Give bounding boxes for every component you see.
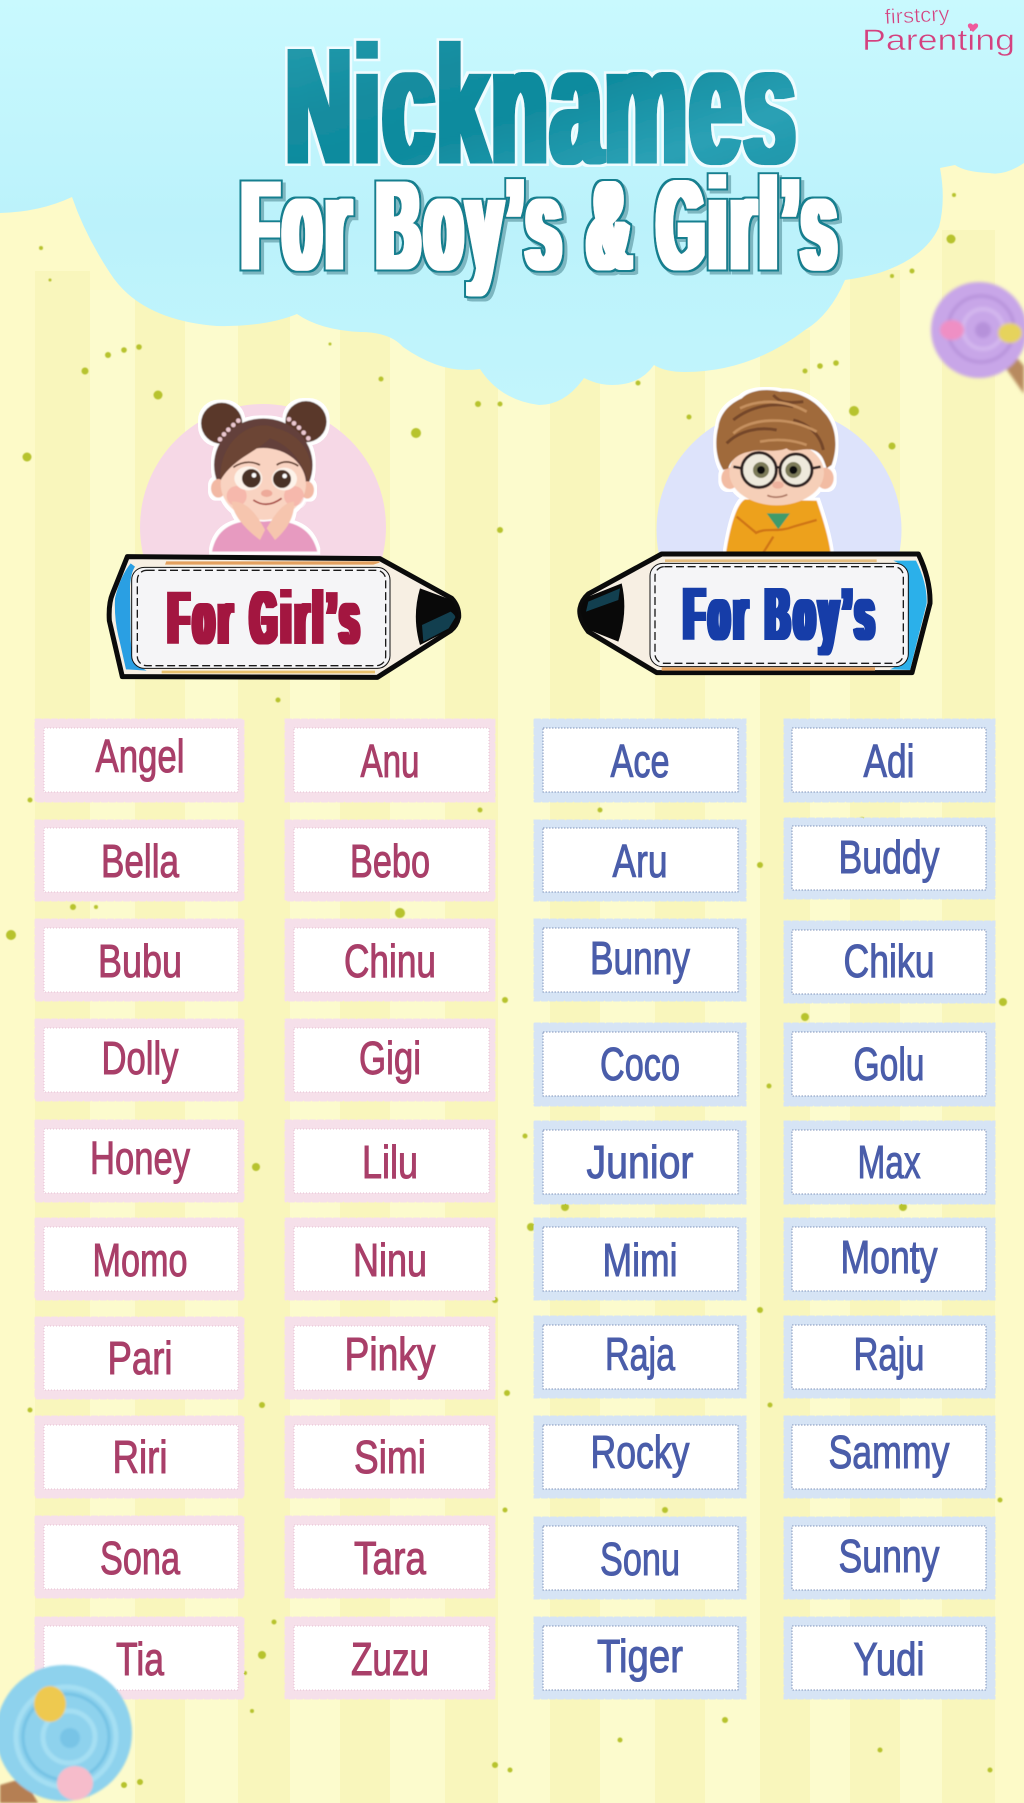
card: Coco: Coco — [600, 1038, 680, 1090]
card: Chinu: Chinu — [344, 935, 436, 987]
card: Momo — [36, 1219, 243, 1299]
card: Adi — [785, 720, 994, 801]
card: Mimi — [535, 1219, 745, 1299]
card: Chiku — [785, 922, 994, 1002]
card: Aru — [535, 821, 745, 900]
heading: For Girl's: For Girl’s — [168, 578, 363, 660]
logo: FirstCry Parenting: firstcry — [884, 3, 951, 29]
card: Simi: Simi — [354, 1431, 426, 1483]
card: Riri — [36, 1417, 243, 1497]
card: Rocky: Rocky — [590, 1426, 690, 1478]
card: Tia: Tia — [116, 1633, 164, 1685]
card: Monty: Monty — [840, 1231, 938, 1283]
card: Chiku: Chiku — [844, 935, 934, 987]
card: Bunny — [535, 920, 745, 1000]
card: Sonu: Sonu — [600, 1533, 680, 1585]
card: Dolly: Dolly — [102, 1032, 178, 1084]
title — [242, 10, 841, 297]
panel: boys' nicknames column 1 — [535, 720, 745, 1698]
card: Zuzu — [286, 1618, 494, 1698]
subtitle: For Boy’s & Girl’s — [242, 151, 841, 297]
card: Lilu: Lilu — [362, 1136, 418, 1188]
card: Raja: Raja — [605, 1328, 675, 1380]
card: Ninu: Ninu — [353, 1234, 427, 1286]
logo: FirstCry Parenting — [862, 3, 1015, 57]
card: Raju — [785, 1317, 994, 1397]
card: Buddy — [785, 819, 994, 898]
lollipop: blue — [0, 1665, 132, 1803]
card: Chinu — [286, 920, 494, 1000]
icon: girl character — [201, 401, 327, 552]
card: Riri: Riri — [112, 1431, 168, 1483]
card: Angel: Angel — [96, 730, 184, 782]
panel: girls' nicknames column 2 — [286, 720, 494, 1698]
card: Monty — [785, 1219, 994, 1299]
section: girls — [109, 401, 459, 677]
card: Ninu — [286, 1219, 494, 1299]
card: Rocky — [535, 1417, 745, 1497]
icon: boy character — [716, 390, 835, 553]
card: Buddy: Buddy — [838, 831, 940, 883]
card: Mimi: Mimi — [602, 1234, 678, 1286]
card: Bella: Bella — [101, 835, 179, 887]
card: Tia — [36, 1618, 243, 1698]
cloud banner — [0, 0, 1024, 405]
panel: boys' nicknames column 2 — [785, 720, 994, 1698]
card: Junior: Junior — [586, 1136, 694, 1188]
card: Yudi — [785, 1618, 994, 1698]
card: Ace — [535, 720, 745, 801]
lollipop: purple — [931, 282, 1024, 394]
card: Coco — [535, 1024, 745, 1105]
card: Junior — [535, 1122, 745, 1203]
card: Anu — [286, 720, 494, 801]
card: Yudi: Yudi — [854, 1633, 924, 1685]
heading: For Boy's: For Boy’s — [684, 573, 878, 656]
card: Simi — [286, 1417, 494, 1497]
card: Golu: Golu — [854, 1038, 924, 1090]
section: boys — [580, 390, 930, 673]
card: Ace: Ace — [610, 735, 670, 787]
card: Bella — [36, 821, 243, 900]
card: Bebo: Bebo — [350, 835, 430, 887]
card: Tara: Tara — [354, 1532, 426, 1584]
card: Lilu — [286, 1121, 494, 1201]
card: Raja — [535, 1317, 745, 1397]
card: Honey — [36, 1121, 243, 1201]
card: Momo: Momo — [92, 1234, 188, 1286]
card: Max: Max — [858, 1136, 920, 1188]
card: Bubu — [36, 920, 243, 1000]
card: Sunny — [785, 1518, 994, 1598]
card: Pinky — [286, 1318, 494, 1398]
card: Golu — [785, 1024, 994, 1105]
card: Angel — [36, 720, 243, 801]
card: Dolly — [36, 1020, 243, 1100]
card: Pari: Pari — [108, 1332, 172, 1384]
card: Sammy — [785, 1417, 994, 1497]
card: Sunny: Sunny — [838, 1530, 940, 1582]
card: Sona: Sona — [100, 1532, 180, 1584]
circle behind boy — [656, 408, 902, 652]
card: Anu: Anu — [360, 735, 420, 787]
circle behind girl — [140, 404, 386, 650]
card: Honey: Honey — [90, 1132, 190, 1184]
pencil banner: For Girl's — [109, 557, 459, 677]
card: Pari — [36, 1318, 243, 1398]
card: Zuzu: Zuzu — [351, 1633, 429, 1685]
card: Pinky: Pinky — [344, 1328, 436, 1380]
card: Gigi: Gigi — [359, 1032, 421, 1084]
card: Tara — [286, 1517, 494, 1597]
card: Aru: Aru — [612, 835, 668, 887]
pencil banner: For Boy's — [580, 554, 930, 673]
card: Adi: Adi — [864, 735, 914, 787]
card: Sammy: Sammy — [828, 1426, 950, 1478]
card: Sonu — [535, 1518, 745, 1598]
card: Bubu: Bubu — [98, 935, 182, 987]
title: Nicknames — [286, 10, 798, 199]
card: Sona — [36, 1517, 243, 1597]
card: Max — [785, 1122, 994, 1203]
card: Tiger — [535, 1618, 745, 1698]
card: Bunny: Bunny — [590, 932, 690, 984]
logo: FirstCry Parenting: Parenting — [862, 24, 1015, 57]
card: Gigi — [286, 1020, 494, 1100]
card: Bebo — [286, 821, 494, 900]
card: Tiger: Tiger — [597, 1630, 683, 1682]
card: Raju: Raju — [854, 1328, 924, 1380]
panel: girls' nicknames column 1 — [36, 720, 243, 1698]
